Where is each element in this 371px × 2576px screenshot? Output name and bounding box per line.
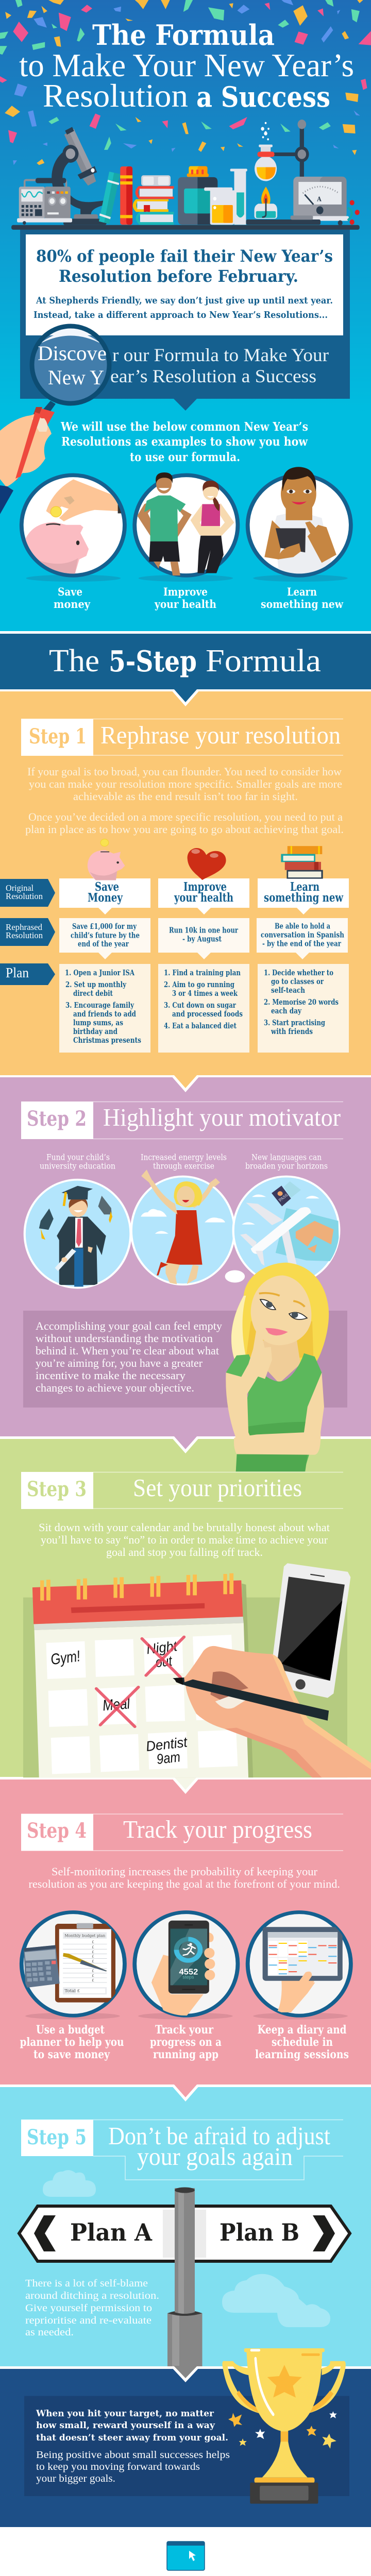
labels: example resolutions: something new [261, 598, 344, 611]
text: common resolutions intro: We will use the below common New Year’s [60, 420, 308, 434]
heading: the 5-step formula: The [49, 643, 99, 679]
panel: step 2 explanation: without understanding the motivation [36, 1332, 213, 1345]
calendar: Gym! [49, 1647, 81, 1668]
heading: step 4 [21, 1814, 343, 1851]
heading: step 1 [21, 719, 343, 756]
row: original resolution [59, 878, 349, 914]
circle: graduate [25, 1180, 130, 1288]
panel: tracking illustrations [22, 1912, 351, 2020]
row: rephrased resolution: child’s future by the [71, 930, 140, 940]
icon: clouds [43, 2170, 330, 2327]
heading: step 1: Step 1 [29, 724, 87, 749]
labels: example resolutions: Learn [287, 585, 317, 598]
labels: example resolutions: Save [58, 585, 82, 598]
row: plan: 1. Open a Junior ISA [65, 968, 134, 977]
row tags: Plan [6, 965, 29, 980]
row tags: Rephrased [6, 922, 42, 932]
circle: budget planner: Monthly budget plan [64, 1934, 106, 1938]
text: discover our formula: r our Formula to Make Your [112, 345, 329, 365]
labels: example resolutions: money [54, 598, 91, 611]
labels: tracking options: to save money [33, 2048, 110, 2061]
row: plan: each day [271, 1006, 302, 1015]
bench top [11, 225, 360, 230]
text: step 1 explanation: achievable as the end result isn’t too far in sight. [73, 790, 298, 803]
title: a Success [196, 80, 330, 113]
labels: tracking options [20, 2023, 349, 2061]
row: plan: self-teach [271, 986, 305, 995]
heading: the 5-step formula: 5-Step [109, 645, 197, 679]
row: plan: 3. Start practising [264, 1018, 325, 1027]
heading: step 1: Rephrase your resolution [100, 721, 341, 749]
row: original resolution: Learn [290, 880, 319, 894]
row: rephrased resolution: - by the end of the year [262, 939, 342, 948]
circle: budget planner [22, 1912, 125, 2020]
labels: motivators: broaden your horizons [245, 1162, 328, 1171]
circle: diary tablet [248, 1912, 351, 2020]
row: rephrased resolution: - by August [182, 935, 222, 944]
panel: step 2 explanation: you’re aiming for, you have a greater [36, 1357, 203, 1369]
labels: tracking options: running app [153, 2048, 218, 2061]
text: step 4 explanation [29, 1865, 340, 1890]
title: The Formula [92, 19, 275, 52]
circle: running app: steps [182, 1975, 194, 1980]
text: step 4 explanation: resolution as you are keeping the goal at the forefront of your mind. [29, 1877, 340, 1890]
illustration: calendar, phone and writing hand [23, 1563, 371, 1777]
row: rephrased resolution [59, 918, 348, 959]
panel: motivator illustrations [25, 1170, 340, 1288]
text: common resolutions intro: Resolutions as examples to show you how [61, 435, 308, 449]
calendar: Meal [102, 1694, 131, 1714]
circle: save money [22, 475, 125, 582]
panel: reward message: When you hit your target, no matter [36, 2409, 214, 2419]
row: original resolution: Money [88, 891, 123, 905]
row tags [0, 879, 55, 985]
heading: step 4: Track your progress [123, 1815, 312, 1843]
row: rephrased resolution: conversation in Spanish [261, 930, 344, 940]
text: common resolutions intro [60, 420, 308, 464]
row: plan: Christmas presents [73, 1036, 141, 1045]
panel: step 2 explanation: changes to achieve your objective. [36, 1381, 194, 1394]
labels: tracking options: Track your [155, 2023, 213, 2037]
row: plan: direct debit [73, 989, 113, 998]
text: discover our formula [110, 345, 329, 386]
text: step 5 explanation: around ditching a resolution. [25, 2290, 159, 2301]
circle: budget planner: £ [92, 1955, 94, 1958]
heading: 80 percent statistic: Instead, take a different approach to New Year’s Resolutions... [33, 310, 328, 320]
heading: step 5 [21, 2120, 343, 2180]
labels: tracking options: learning sessions [255, 2048, 349, 2061]
phone [269, 1563, 350, 1698]
text: step 3 explanation: you’ll have to say “no” to in order to make time to achieve your [41, 1533, 328, 1546]
icon: trophy with stars [222, 2348, 346, 2504]
text: step 5 explanation [25, 2278, 159, 2338]
flask on stand with burner [255, 120, 309, 219]
row: original resolution: your health [174, 891, 233, 905]
labels: tracking options: planner to help you [20, 2036, 124, 2049]
row: plan: 1. Decide whether to [264, 968, 333, 977]
text: step 1 explanation [25, 765, 344, 836]
text: step 3 explanation [39, 1521, 330, 1558]
row: rephrased resolution: Save £1,000 for my [72, 922, 137, 931]
calendar: Dentist [145, 1735, 189, 1755]
panel: reward message: Being positive about small successes helps [36, 2449, 230, 2461]
row: original resolution: Save [95, 880, 119, 894]
heading: step 5: your goals again [137, 2142, 293, 2171]
circle: running app [134, 1912, 238, 2020]
books [99, 166, 174, 225]
microscope [57, 127, 111, 225]
labels: example resolutions: your health [154, 598, 216, 611]
row: plan: 3. Cut down on sugar [164, 1001, 237, 1010]
row tags: Original [6, 883, 33, 893]
panel: intro background [0, 0, 371, 412]
panel: step 2 explanation: behind it. When you’re clear about what [36, 1344, 219, 1357]
circle: budget planner: £ [92, 1959, 94, 1963]
circle: budget planner: Total £ [64, 1989, 80, 1993]
circle: running app: 4552 [179, 1967, 198, 1976]
icon: plan a plan b signpost: Plan A [70, 2218, 153, 2246]
row: plan: and friends to add [73, 1009, 136, 1019]
hand holding pen [173, 1646, 371, 1777]
labels: tracking options: Keep a diary and [258, 2023, 346, 2037]
heading: step 2: Step 2 [27, 1107, 87, 1131]
section dividers [0, 631, 371, 2369]
heading: step 2 [21, 1101, 343, 1139]
heading: step 5: Don’t be afraid to adjust [108, 2122, 330, 2150]
table: rephrased resolutions and plans [0, 839, 349, 1053]
circle: travel: PASS [278, 1193, 289, 1202]
panel: reward message: to keep you moving forward towards [36, 2461, 200, 2472]
row: plan: 2. Memorise 20 words [264, 997, 339, 1007]
row: rephrased resolution: end of the year [78, 939, 129, 948]
labels: example resolutions [54, 585, 344, 611]
title [19, 19, 354, 114]
text: step 5 explanation: There is a lot of self-blame [25, 2278, 148, 2289]
icon: magnifying glass in hand: Discove [38, 342, 107, 365]
panel: reward message: your bigger goals. [36, 2473, 115, 2484]
labels: tracking options: schedule in [272, 2036, 333, 2049]
panel: step 2 explanation [23, 1311, 347, 1408]
panel: intro text table [20, 230, 350, 411]
text: step 5 explanation: reprioritise and re-evaluate [25, 2315, 151, 2326]
row: plan: 2. Aim to go running [164, 980, 234, 989]
row: rephrased resolution: Be able to hold a [275, 922, 330, 931]
calendar [32, 1573, 253, 1777]
icon: plan a plan b signpost [19, 2188, 350, 2366]
title: Resolution [43, 77, 188, 114]
calendar: 9am [156, 1749, 181, 1768]
icon: magnifying glass in hand [0, 325, 109, 514]
confetti [0, 0, 371, 165]
icon: magnifying glass in hand: New Y [48, 366, 104, 389]
labels: tracking options: Use a budget [36, 2023, 105, 2037]
labels: motivators [40, 1153, 328, 1171]
heading: 80 percent statistic: Resolution before February. [59, 266, 298, 286]
thought bubble [225, 1270, 245, 1283]
panel: step 2 explanation: Accomplishing your goal can feel empty [36, 1319, 222, 1332]
jar [178, 166, 217, 225]
illustration: thinking woman [226, 1263, 329, 1471]
text: step 1 explanation: you can make your resolution more specific. Smaller goals are more [29, 777, 342, 790]
circle: budget planner: £ [92, 1974, 94, 1978]
calendar: Night [145, 1638, 179, 1657]
text: step 1 explanation: If your goal is too broad, you can flounder. You need to consider how [27, 765, 342, 778]
heading: step 3: Step 3 [27, 1477, 87, 1501]
panel: step 2 explanation: incentive to make the necessary [36, 1369, 185, 1382]
row: plan: birthday and [73, 1027, 117, 1036]
heading: 80 percent statistic: 80% of people fail their New Year’s [36, 246, 333, 266]
heading: step 5: Step 5 [27, 2125, 87, 2149]
text: common resolutions intro: to use our formula. [130, 450, 240, 464]
text: step 3 explanation: Sit down with your calendar and be brutally honest about what [39, 1521, 330, 1534]
circle: travel [233, 1177, 340, 1284]
calendar: out [155, 1653, 174, 1671]
circle: budget planner: £ [92, 1945, 94, 1949]
row: original resolution: Improve [183, 880, 227, 894]
row: original resolution: something new [264, 891, 344, 905]
labels: motivators: New languages can [251, 1153, 322, 1162]
heading: step 3: Set your priorities [133, 1473, 302, 1502]
text: step 1 explanation: Once you’ve decided on a more specific resolution, you need to put a [28, 810, 343, 823]
circle: learn something new [248, 467, 351, 582]
chevron: post tip [171, 2366, 200, 2382]
panel: reward message: that doesn’t steer away from your goal. [36, 2433, 228, 2443]
labels: motivators: Increased energy levels [141, 1153, 227, 1162]
panel: reward message [24, 2396, 349, 2496]
icon: website browser [167, 2541, 205, 2570]
row: plan: lump sums, as [73, 1018, 123, 1027]
circle: budget planner: £ [92, 1969, 94, 1973]
panel: reward message: how small, reward yourself in a way [36, 2420, 215, 2431]
title: to Make Your New Year’s [19, 47, 354, 83]
row: plan: with friends [271, 1027, 313, 1036]
text: step 1 explanation: plan in place as to how you are going to go about achieving that goal. [25, 823, 344, 836]
labels: tracking options: progress on a [150, 2036, 222, 2049]
heading: step 3 [21, 1472, 343, 1509]
row: plan: 3 or 4 times a week [172, 989, 238, 998]
labels: motivators: university education [40, 1162, 115, 1171]
row: rephrased resolution: Run 10k in one hour [169, 925, 239, 935]
heading: the 5-step formula: Formula [206, 643, 321, 679]
ammeter [246, 177, 360, 226]
row: plan: 2. Set up monthly [65, 980, 127, 989]
heading: step 4: Step 4 [27, 1819, 87, 1843]
oscilloscope [17, 178, 72, 225]
labels: motivators: through exercise [153, 1162, 214, 1171]
text: step 5 explanation: as needed. [25, 2327, 74, 2338]
labels: motivators: Fund your child’s [46, 1153, 110, 1162]
text: step 5 explanation: Give yourself permission to [25, 2302, 152, 2314]
cylinder and beaker [204, 169, 247, 225]
heading: the 5-step formula [49, 643, 321, 679]
icons: coin, piggy bank, heart, books [88, 839, 323, 880]
circle: budget planner: £ [92, 1978, 94, 1982]
text: step 4 explanation: Self-monitoring increases the probability of keeping your [52, 1865, 318, 1878]
ammeter: A [316, 195, 322, 202]
circle: budget planner: £ [92, 1950, 94, 1954]
circle: budget planner: £ [92, 1940, 94, 1944]
icon: laboratory bench with equipment [11, 120, 360, 230]
row: plan [59, 964, 349, 1053]
heading: step 2: Highlight your motivator [103, 1103, 341, 1131]
row: plan: 3. Encourage family [65, 1001, 134, 1010]
heading: 80 percent statistic [33, 246, 333, 320]
row: plan: 4. Eat a balanced diet [164, 1021, 237, 1030]
heading: 80 percent statistic: At Shepherds Friendly, we say don’t just give up until next year. [36, 295, 333, 306]
text: discover our formula: ear’s Resolution a Success [110, 366, 316, 386]
row: plan: 1. Find a training plan [164, 968, 241, 977]
circle: jumping woman [131, 1170, 234, 1284]
text: step 3 explanation: goal and stop you falling off track. [106, 1546, 263, 1558]
icon: plan a plan b signpost: Plan B [220, 2218, 299, 2246]
circle: improve your health [134, 472, 238, 582]
row: plan: and processed foods [172, 1009, 243, 1019]
labels: example resolutions: Improve [163, 585, 208, 598]
row tags: Resolution [6, 930, 43, 940]
panel: three example resolutions [22, 467, 351, 582]
row tags: Resolution [6, 891, 43, 901]
row: plan: go to classes or [271, 977, 324, 986]
